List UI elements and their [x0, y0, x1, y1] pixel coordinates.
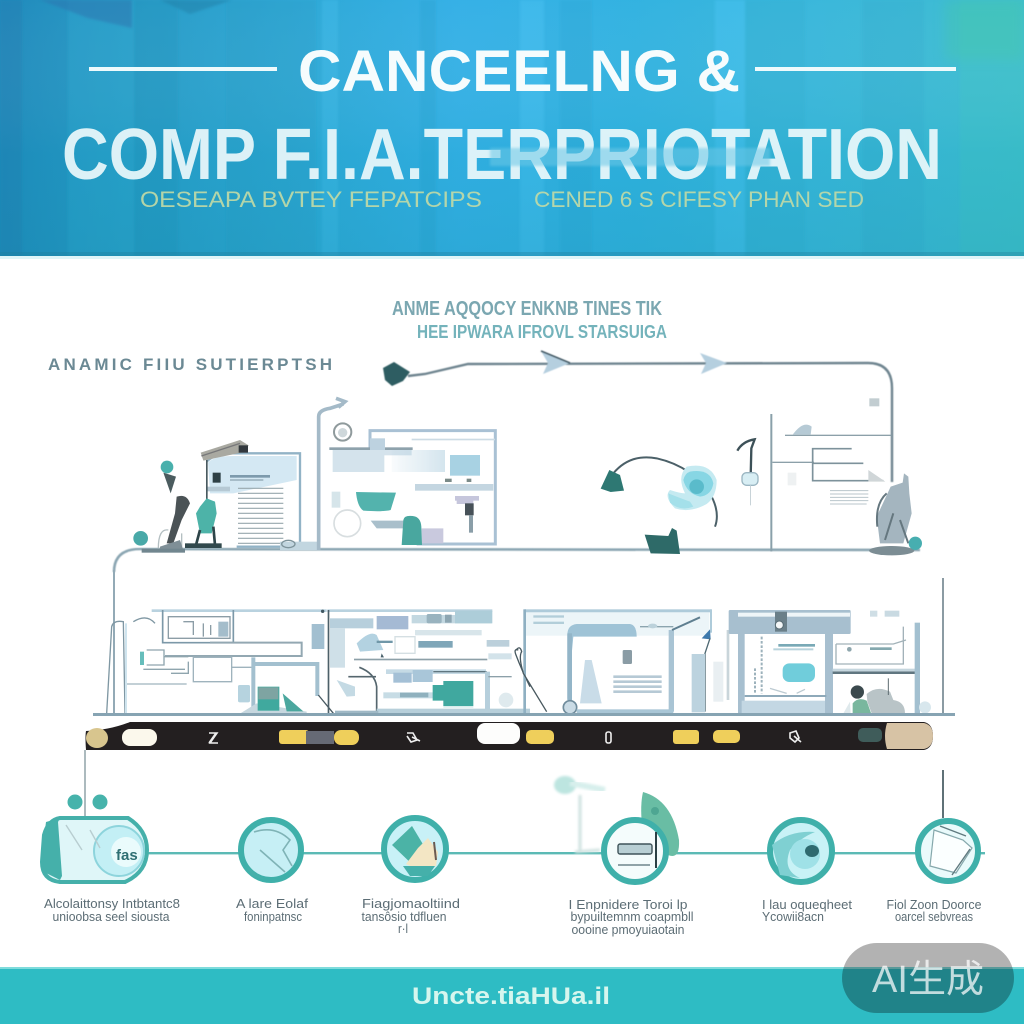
- upper baseline: [114, 549, 920, 572]
- step 1 icon: [42, 818, 147, 882]
- dark folder: [645, 528, 680, 554]
- title rule right: [755, 67, 956, 71]
- lower baseline: [93, 713, 955, 716]
- gauge icon: [334, 423, 351, 441]
- tan end cap right: [885, 723, 933, 749]
- dark stand figure: [158, 496, 190, 551]
- step 4 label: [568, 898, 694, 937]
- teal basin: [356, 492, 396, 511]
- title line two: COMP F.I.A.TERPRIOTATION: [62, 115, 942, 195]
- yellow pill four: [713, 730, 740, 743]
- header banner: [0, 0, 1024, 259]
- step 6 label: Fiol Zoon Doorce: [886, 898, 982, 912]
- panel D side shelf: [833, 611, 931, 713]
- title smear overlay: [490, 148, 770, 166]
- upper middle lab panel: [319, 398, 495, 550]
- step 4 label: I Enpnidere Toroi lp: [568, 898, 688, 912]
- teal chair: [371, 516, 443, 545]
- step 3 label: tansôsio tdfluen: [362, 910, 447, 924]
- yellow pill three: [673, 730, 699, 744]
- teal ball: [133, 531, 148, 546]
- step 2 label: A lare Eolaf: [236, 897, 309, 911]
- upper right scene: [601, 398, 922, 555]
- bar icon one: [209, 733, 218, 743]
- title rule left: [89, 67, 277, 71]
- step 2 icon: [241, 820, 301, 880]
- pin with tag: [737, 439, 758, 505]
- process caption line two: HEE IPWARA IFROVL STARSUIGA: [417, 322, 667, 342]
- teal balloon marker: [161, 461, 176, 493]
- white blob pill: [477, 723, 520, 744]
- step 1 label: unioobsa seel siousta: [52, 910, 170, 924]
- AI generated badge: [842, 943, 1014, 1013]
- printer device: [201, 440, 249, 503]
- mid loop connector line: [113, 570, 115, 716]
- bar drop connector right: [942, 770, 944, 818]
- upper process flow arrow: [383, 351, 892, 482]
- step 1 label: [44, 897, 180, 924]
- loop pipe: [107, 618, 155, 713]
- standing pipe: [319, 398, 345, 550]
- step 5 label: I lau oqueqheet: [762, 898, 853, 912]
- teal device A: [238, 687, 307, 715]
- step 1 twin teal dots: [68, 794, 108, 810]
- subtitle right: CENED 6 S CIFESY PHAN SED: [534, 187, 864, 212]
- yellow pill two: [526, 730, 554, 744]
- white pill: [122, 729, 157, 746]
- wall panel with schematic: [770, 398, 892, 551]
- AI generated badge: AI生成: [872, 959, 984, 1001]
- title line one: CANCEELNG &: [298, 39, 740, 104]
- step 6 label: oarcel sebvreas: [895, 910, 973, 924]
- panel B: [321, 609, 512, 713]
- step 2 label: [236, 897, 309, 924]
- step 1 icon: fas: [116, 847, 138, 864]
- step 5 label: Ycowii8acn: [762, 910, 824, 924]
- step 4 backdrop plant: [554, 776, 679, 856]
- upper left equipment scene: [133, 440, 320, 553]
- step 4 icon: [604, 820, 666, 882]
- lower right equipment panels: [516, 609, 931, 714]
- bar icon two: [407, 733, 420, 742]
- lower left equipment panels: [107, 609, 530, 715]
- bar drop connector left: [84, 750, 86, 818]
- bar icon four: [790, 731, 801, 742]
- section caption left: ANAMIC FIIU SUTIERPTSH: [48, 355, 332, 374]
- panel D machine: [729, 610, 851, 714]
- panel C: [516, 609, 729, 714]
- cyan lens form: [668, 466, 717, 510]
- step 4 label: bypuiltemnm coapmbll: [570, 910, 694, 924]
- step 1 label: Alcolaittonsy Intbtantc8: [44, 897, 180, 911]
- step 3 label: r·l: [398, 922, 408, 936]
- step 4 label: oooine pmoyuiaotain: [572, 923, 685, 937]
- dark status bar: [86, 722, 933, 750]
- valve fixture: [455, 496, 479, 533]
- seated figures: [843, 678, 905, 714]
- step 5 icon: [770, 820, 832, 882]
- step 6 label: [886, 898, 982, 924]
- tan end cap left: [86, 728, 108, 748]
- subtitle left: OESEAPA BVTEY FEPATCIPS: [140, 187, 482, 212]
- yellow pill group one: [279, 730, 359, 745]
- step timeline line: [145, 852, 985, 854]
- bar icon three: [606, 732, 611, 743]
- footer band: [0, 967, 1024, 1024]
- footer text: Uncte.tiaHUa.il: [412, 983, 610, 1010]
- panel A: [125, 609, 333, 713]
- round outline: [334, 510, 361, 537]
- cabinet frame: [329, 431, 495, 544]
- gray creature sculpture: [869, 473, 922, 555]
- step 3 label: [362, 897, 460, 936]
- panel B lower equipment: [335, 650, 530, 714]
- step 5 label: [762, 898, 853, 924]
- teal figure: [185, 498, 222, 548]
- step 2 label: foninpatnsc: [244, 910, 302, 924]
- curved lamp: [601, 457, 717, 527]
- step 3 label: Fiagjomaoltiind: [362, 897, 460, 911]
- process caption line one: ANME AQQOCY ENKNB TINES TIK: [392, 298, 662, 320]
- step 3 icon: [384, 818, 446, 880]
- document panel: [207, 453, 320, 550]
- mid right vertical line: [942, 578, 944, 714]
- step 6 icon: [918, 821, 978, 881]
- dark teal pill: [858, 728, 882, 742]
